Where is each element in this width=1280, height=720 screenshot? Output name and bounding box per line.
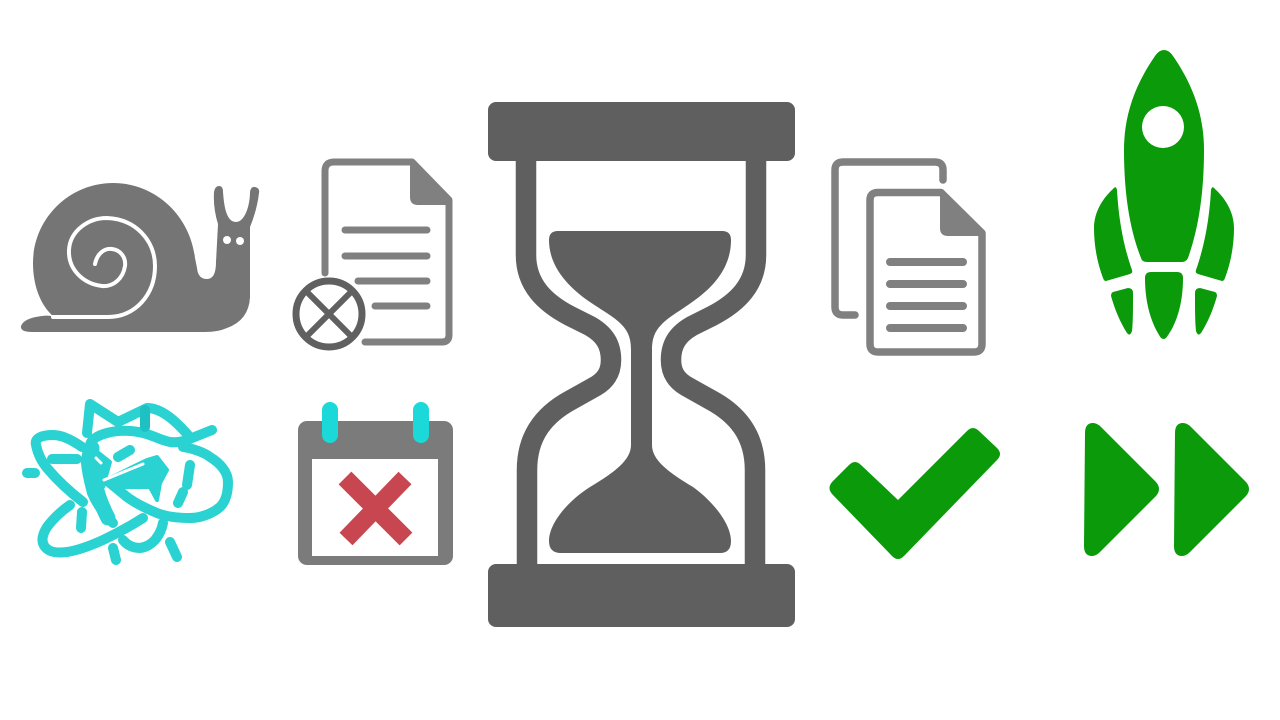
icon: hourglass — [488, 102, 795, 627]
icon: document copies — [835, 162, 983, 352]
icon: fast-forward arrows — [1084, 423, 1249, 556]
icon: green check mark — [830, 428, 1000, 559]
icon: cancelled calendar — [298, 402, 453, 565]
icon: green rocket — [1094, 50, 1234, 339]
icon: snail — [21, 183, 259, 332]
icon: rejected document — [296, 162, 449, 347]
icon: tangled teal scribble — [27, 404, 228, 560]
